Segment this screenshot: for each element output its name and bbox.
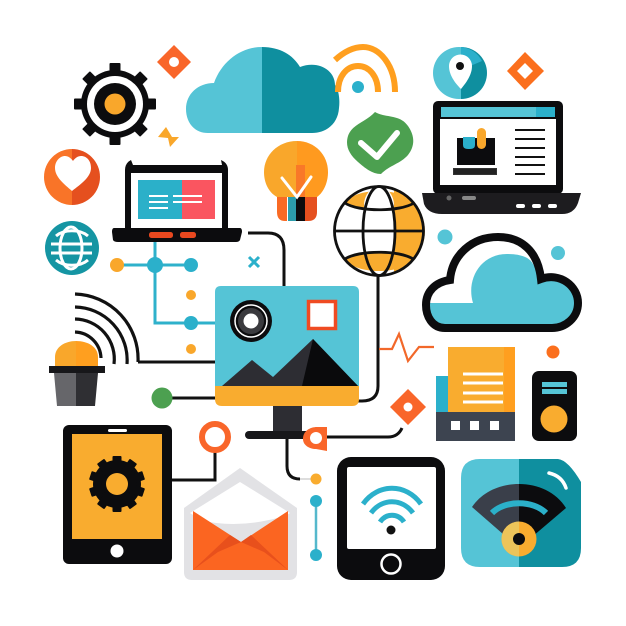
monitor screen [215, 286, 359, 386]
icon: outlined cloud [426, 237, 578, 328]
icon: teal globe badge [45, 221, 99, 275]
connector: black lines [138, 233, 402, 480]
icon: left tablet [63, 425, 172, 564]
connector: blue node pair [300, 474, 322, 561]
icon: bottom tablet [337, 457, 445, 580]
camera lens [230, 300, 272, 342]
icon: spark [158, 127, 179, 147]
mountains [222, 339, 358, 386]
icon: wifi top [335, 47, 395, 93]
icon: left laptop [112, 160, 242, 242]
monitor bottom bar [215, 386, 359, 406]
icon: lightbulb [264, 141, 328, 221]
icon: right laptop [422, 101, 581, 214]
icon: orange diamond centre [390, 389, 426, 425]
icon: heart badge [44, 149, 100, 205]
icon: wifi app square [461, 459, 581, 567]
icon: orange globe [334, 186, 425, 276]
icon: dots beside cloud [438, 230, 565, 260]
icon: green check badge [347, 112, 413, 174]
icon: teal cloud [186, 47, 339, 133]
icon: blue x mark [249, 257, 259, 267]
icon: orange ring [202, 424, 228, 450]
icon: document stack [436, 347, 515, 441]
gear [89, 456, 145, 512]
connector: blue network lines [110, 242, 215, 354]
icon: map pin [433, 47, 487, 99]
icon: orange ring connector [303, 427, 327, 451]
red square frame [308, 302, 336, 328]
icon: pulse line [379, 334, 434, 361]
icon: envelope [184, 468, 297, 580]
icon: orange diamond [157, 45, 191, 79]
icon: green dot [152, 388, 172, 408]
icon: wifi signal with dome pot [49, 294, 138, 406]
icon: small device [532, 346, 577, 441]
icon: orange diamond right [507, 52, 544, 90]
icon: gear [74, 63, 156, 145]
monitor [215, 286, 359, 439]
monitor stand [245, 405, 310, 439]
